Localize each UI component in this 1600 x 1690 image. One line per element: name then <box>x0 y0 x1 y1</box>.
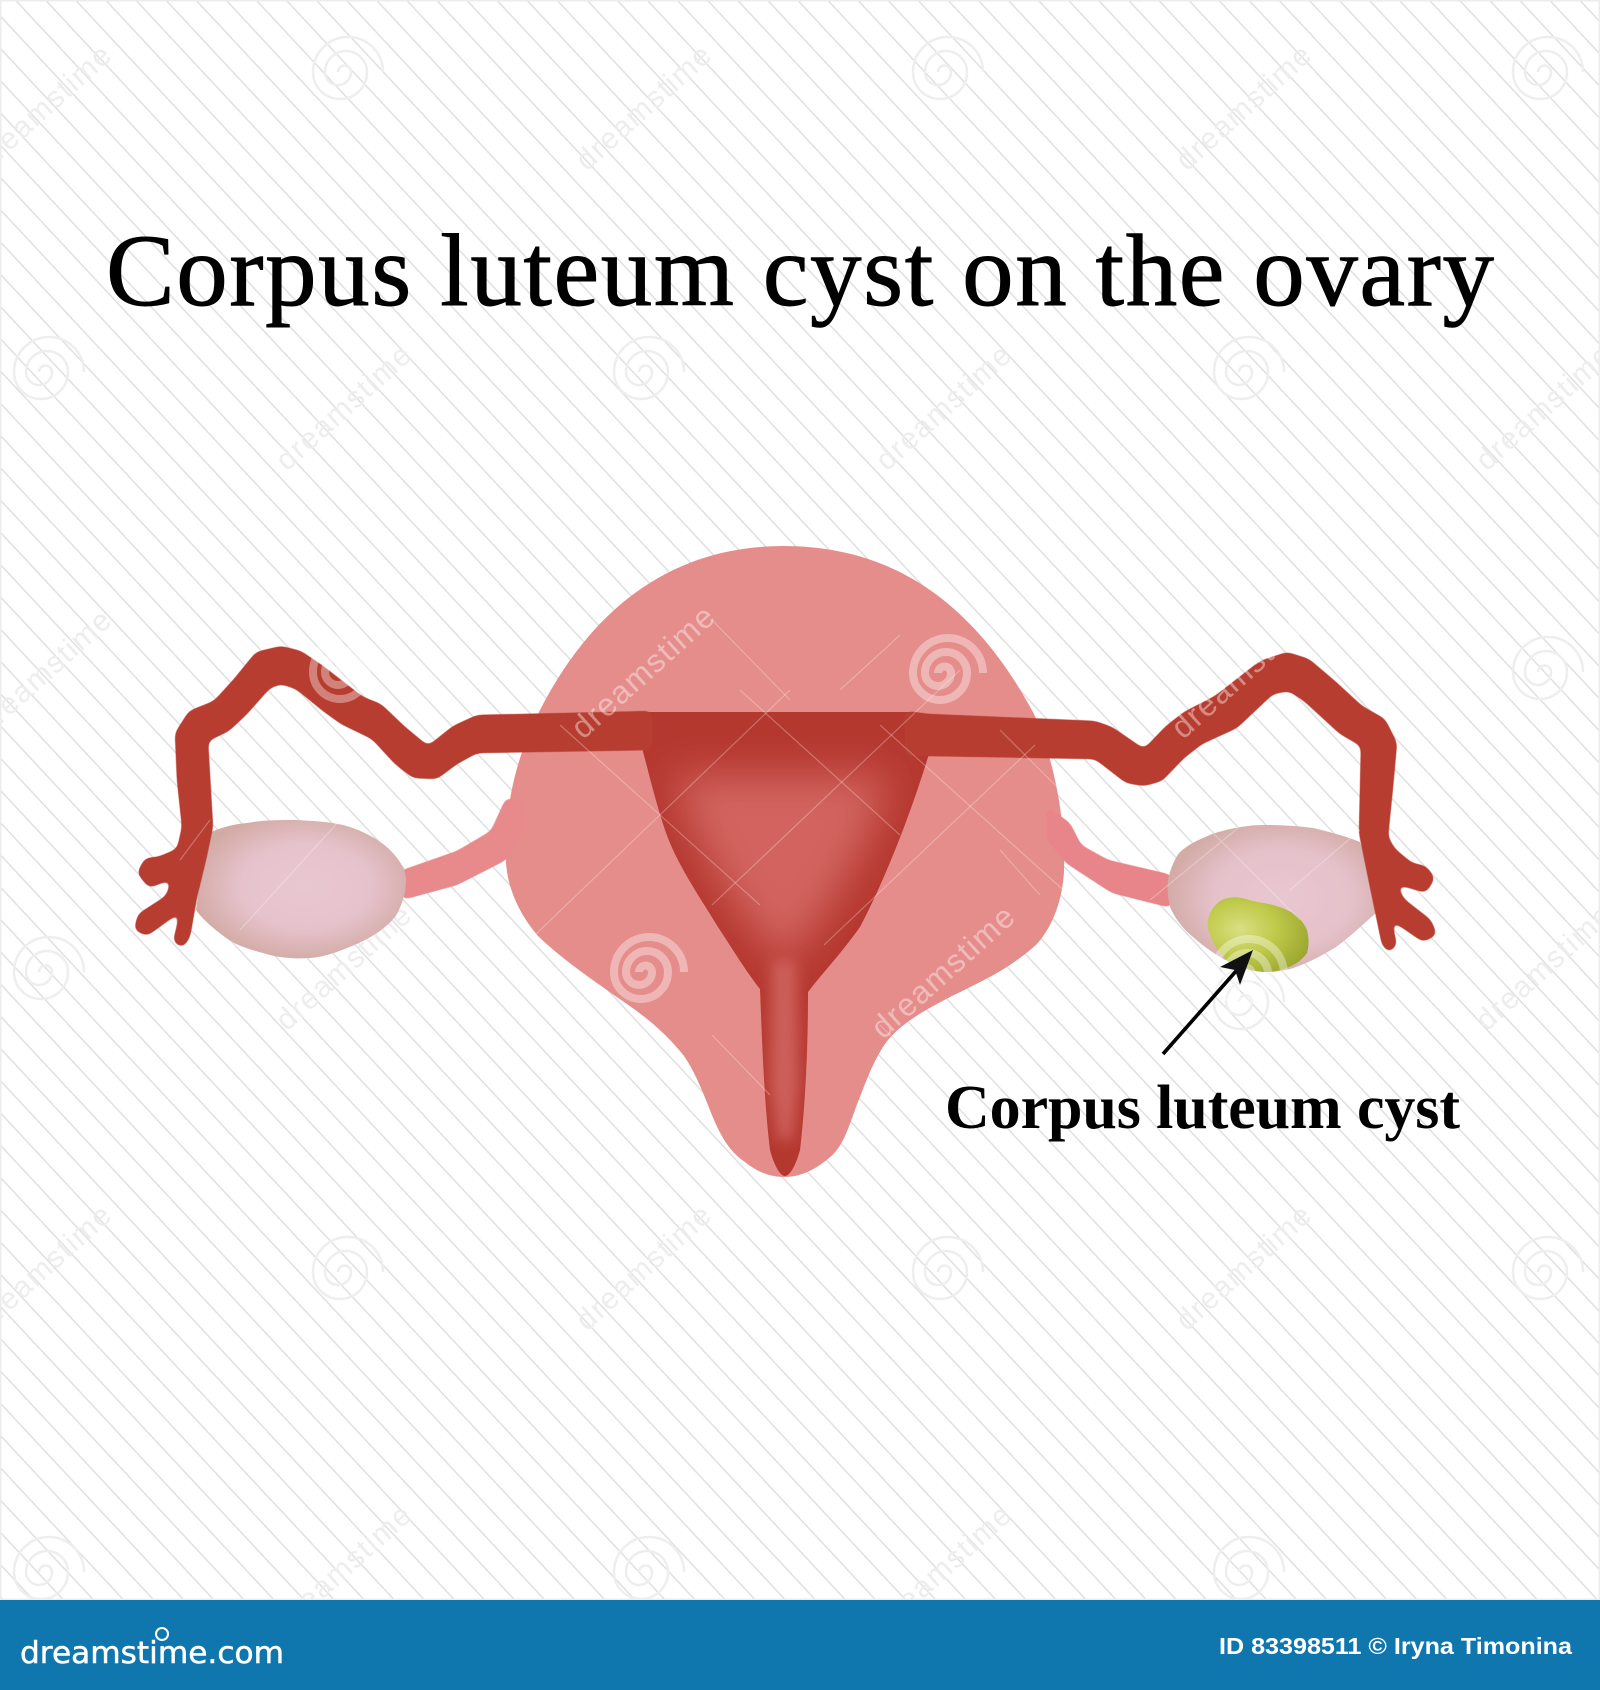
watermark pattern on background: dreamstime <box>1169 39 1318 177</box>
footer logo spiral <box>156 1628 168 1640</box>
watermark pattern on background: dreamstime <box>869 1499 1018 1637</box>
uterine cavity <box>642 712 928 1176</box>
footer logo: dreamstime.com <box>20 1636 284 1671</box>
white watermark over diagram: dreamstime <box>1164 598 1322 745</box>
right ligament <box>1046 806 1172 908</box>
right ovary <box>1168 825 1376 972</box>
white watermark over diagram: dreamstime <box>864 898 1022 1045</box>
arrow <box>1163 950 1253 1054</box>
watermark pattern on background: dreamstime <box>269 1499 418 1637</box>
white watermark over diagram <box>180 598 1360 1095</box>
corpus luteum cyst <box>1208 897 1308 972</box>
image credit: ID 83398511 © Iryna Timonina <box>1219 1633 1572 1659</box>
crossing watermark lines <box>180 620 1360 1095</box>
watermark pattern on background: dreamstime <box>569 1199 718 1337</box>
watermark pattern on background: dreamstime <box>569 39 718 177</box>
left fallopian tube <box>134 646 652 948</box>
watermark pattern on background: dreamstime <box>1169 1199 1318 1337</box>
cyst label: Corpus luteum cyst <box>945 1074 1460 1142</box>
right fallopian tube <box>905 652 1437 953</box>
footer bar <box>0 1600 1600 1690</box>
title: Corpus luteum cyst on the ovary <box>106 214 1494 328</box>
watermark pattern on background: dreamstime <box>869 339 1018 477</box>
left ovary <box>196 820 406 958</box>
uterus body <box>506 546 1064 1177</box>
watermark pattern on background: dreamstime <box>269 339 418 477</box>
left ligament <box>400 798 527 900</box>
uterus diagram <box>134 546 1437 1190</box>
watermark pattern on background: dreamstime <box>269 899 418 1037</box>
white watermark over diagram: dreamstime <box>564 598 722 745</box>
